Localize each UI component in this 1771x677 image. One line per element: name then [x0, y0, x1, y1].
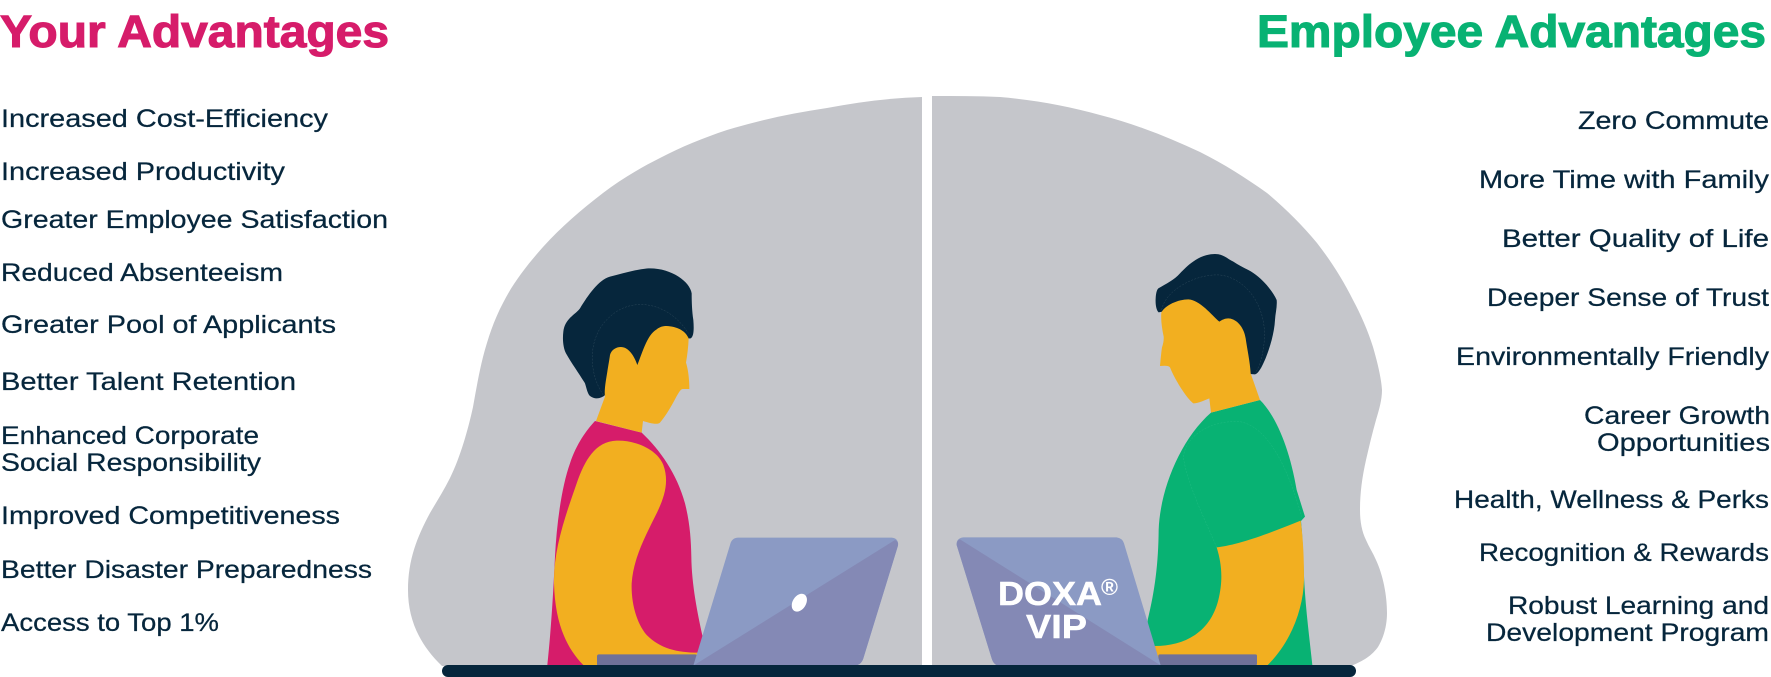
DOXA wordmark: DOXA — [998, 575, 1102, 612]
list: your advantages — [1, 105, 388, 637]
registered mark: ® — [1101, 574, 1118, 600]
item: learning: Development Program — [1486, 619, 1769, 647]
item: retention: Better Talent Retention — [1, 368, 296, 396]
arm — [554, 441, 698, 665]
hair — [1156, 254, 1277, 374]
hair — [563, 268, 694, 398]
item: environment: Environmentally Friendly — [1456, 343, 1770, 371]
keyboard — [1158, 654, 1257, 665]
item: quality of life: Better Quality of Life — [1502, 225, 1769, 253]
laptop lid — [693, 538, 898, 666]
item: applicants: Greater Pool of Applicants — [1, 311, 336, 339]
background blob: left half — [408, 97, 922, 666]
item: recognition: Recognition & Rewards — [1479, 539, 1769, 567]
item: health: Health, Wellness & Perks — [1454, 486, 1769, 514]
laptop brand text — [998, 574, 1118, 645]
item: social responsibility: Enhanced Corporate — [1, 422, 259, 450]
torso: pink top — [547, 421, 703, 665]
laptop logo — [789, 591, 810, 614]
VIP wordmark: VIP — [1026, 608, 1087, 645]
head and neck — [596, 326, 689, 433]
list: employee advantages — [1454, 107, 1770, 647]
background blob: right half — [932, 96, 1387, 666]
desk — [442, 665, 1356, 677]
item: social responsibility: Social Responsibility — [1, 449, 262, 477]
keyboard — [597, 654, 697, 666]
laptop lid — [957, 537, 1161, 665]
item: cost efficiency: Increased Cost-Efficiency — [1, 105, 329, 133]
head and neck — [1160, 299, 1260, 413]
laptop lid shadow — [957, 539, 1161, 665]
item: competitiveness: Improved Competitiveness — [1, 502, 340, 530]
item: family time: More Time with Family — [1479, 166, 1770, 194]
item: learning: Robust Learning and — [1508, 592, 1769, 620]
figure: left person with laptop — [547, 268, 898, 666]
item: career growth: Career Growth — [1584, 402, 1770, 430]
item: disaster preparedness: Better Disaster Preparedness — [1, 556, 372, 584]
item: career growth — [1584, 402, 1770, 457]
item: productivity: Increased Productivity — [1, 158, 286, 186]
item: trust: Deeper Sense of Trust — [1487, 284, 1769, 312]
heading: Employee Advantages: Employee Advantages — [1257, 6, 1766, 57]
laptop lid shadow — [693, 540, 898, 666]
item: commute: Zero Commute — [1578, 107, 1769, 135]
arm — [1155, 521, 1304, 665]
item: absenteeism: Reduced Absenteeism — [1, 259, 283, 287]
item: career growth: Opportunities — [1597, 429, 1770, 457]
item: learning — [1486, 592, 1769, 647]
heading: Your Advantages: Your Advantages — [0, 6, 389, 57]
item: satisfaction: Greater Employee Satisfaction — [1, 206, 388, 234]
torso: green shirt — [1147, 400, 1312, 665]
figure: right person with laptop — [957, 254, 1312, 665]
item: top talent: Access to Top 1% — [1, 609, 219, 637]
item: social responsibility — [1, 422, 262, 477]
